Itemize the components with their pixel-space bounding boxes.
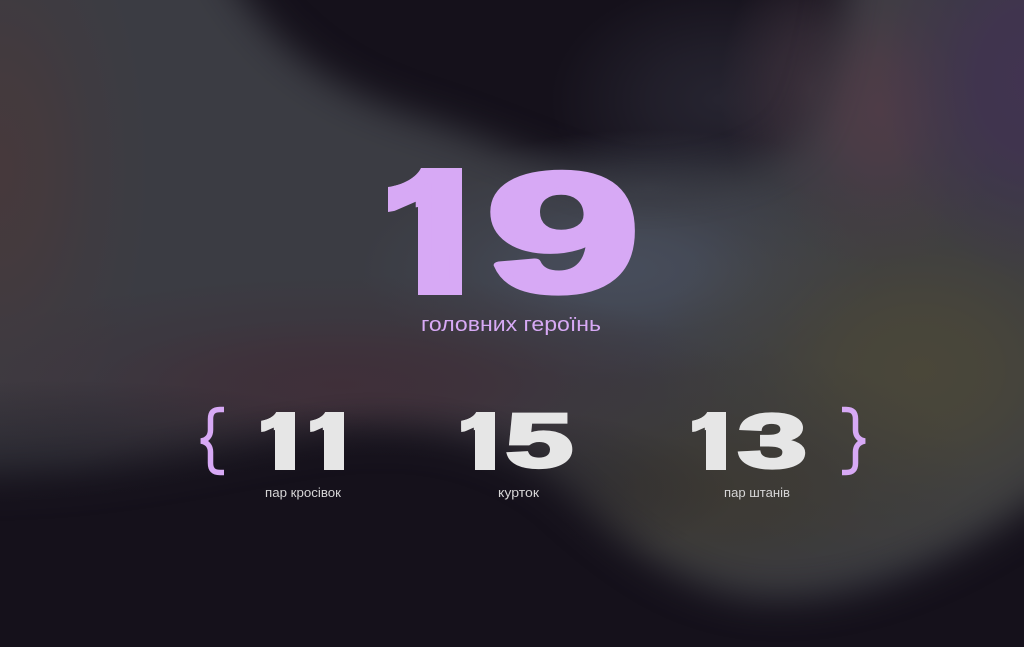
- label: пар штанів: [724, 485, 790, 500]
- stat: jackets: [461, 412, 572, 500]
- label: пар кросівок: [265, 485, 341, 500]
- main caption: головних героїнь: [421, 314, 601, 336]
- number 13: 3: [738, 399, 807, 483]
- digit 1: 1: [366, 135, 504, 328]
- right brace: [842, 410, 865, 472]
- left brace: [201, 410, 224, 472]
- number 11: [261, 412, 344, 470]
- digit 9: 9: [486, 139, 639, 327]
- number 15: 5: [506, 399, 573, 483]
- number 11: 1: [300, 396, 363, 485]
- number 13: 1: [682, 396, 745, 485]
- number 11: 1: [251, 396, 314, 485]
- label: курток: [498, 485, 539, 500]
- number 13: [692, 412, 806, 470]
- number 15: [461, 412, 572, 470]
- stat: trousers: [692, 412, 806, 500]
- stat: sneakers: [261, 412, 344, 500]
- number 15: 1: [451, 396, 514, 485]
- main number: 19: [388, 168, 635, 296]
